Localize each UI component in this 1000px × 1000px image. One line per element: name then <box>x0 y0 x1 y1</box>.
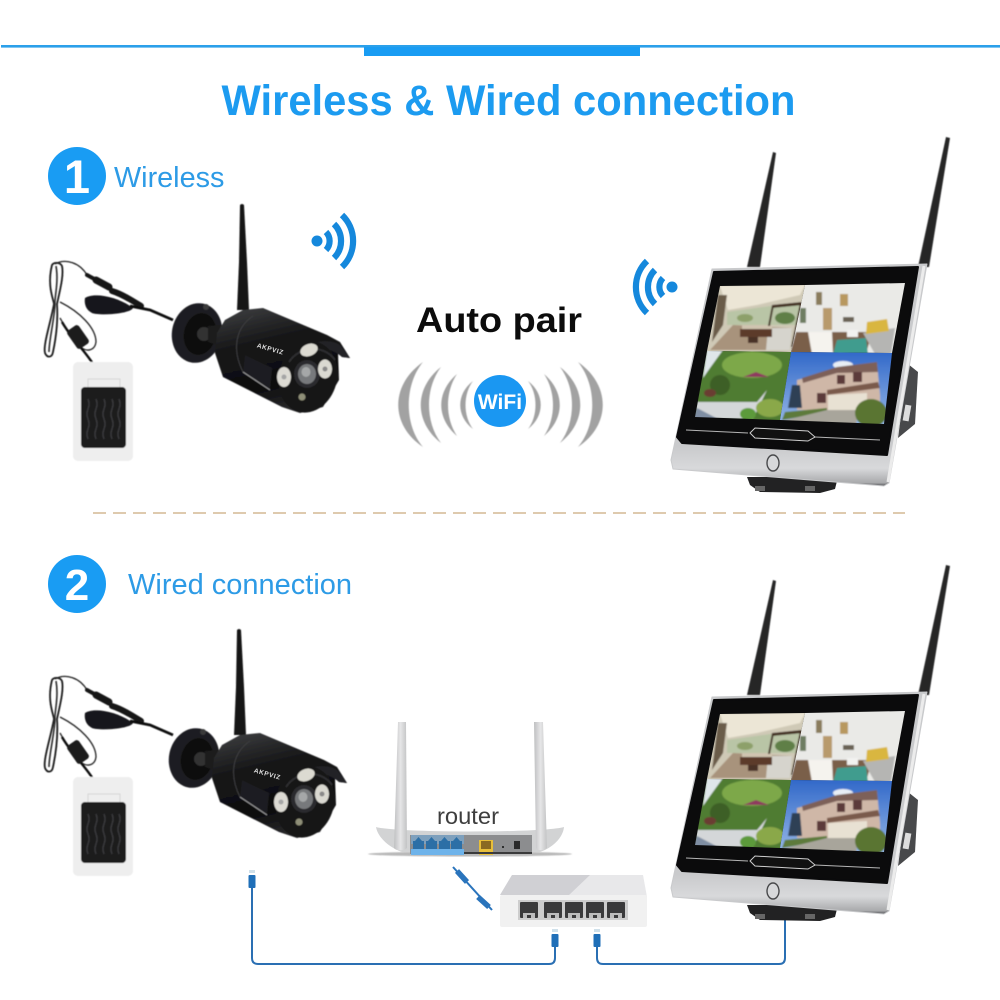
step 1 heading <box>48 147 224 205</box>
power adapter and cables <box>45 676 173 876</box>
bullet camera: AKPVIZ <box>253 767 281 782</box>
cable: camera to switch <box>248 870 558 964</box>
bullet camera <box>166 204 350 419</box>
cable: switch to monitor <box>594 902 788 964</box>
step 2 heading: 2 <box>65 561 89 610</box>
bullet camera <box>163 629 347 844</box>
router label: router <box>437 803 499 829</box>
camera with power adapter, wired <box>45 629 347 876</box>
section divider <box>93 512 905 514</box>
header rule <box>1 45 1000 56</box>
LCD monitor NVR, wireless <box>671 137 950 493</box>
step 2 heading <box>48 555 352 613</box>
cable: router to switch <box>453 867 492 910</box>
step 1 heading: Wireless <box>114 162 224 194</box>
step 2 heading: Wired connection <box>128 569 352 601</box>
power adapter and cables <box>45 261 173 461</box>
icon: wifi signal from camera <box>312 215 353 267</box>
auto pair label: Auto pair <box>416 301 582 340</box>
title: Wireless & Wired connection <box>222 78 796 125</box>
icon: wifi signal to monitor <box>636 261 678 313</box>
LCD monitor NVR, wired <box>671 565 950 921</box>
network switch <box>500 875 647 927</box>
icon: WiFi pairing badge: WiFi <box>478 391 522 414</box>
router <box>368 722 572 856</box>
camera with power adapter, wireless <box>45 204 350 461</box>
step 1 heading: 1 <box>64 150 90 203</box>
bullet camera: AKPVIZ <box>256 342 284 357</box>
icon: WiFi pairing badge <box>398 362 603 447</box>
router antennas <box>394 722 547 850</box>
